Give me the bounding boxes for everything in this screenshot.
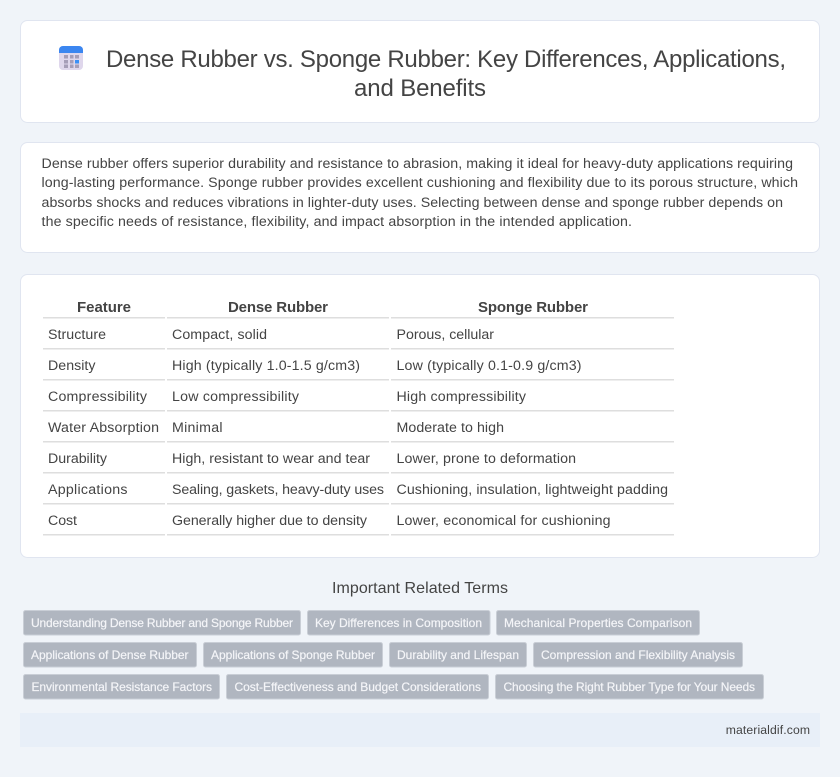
tag row 1: Mechanical Properties Comparison bbox=[504, 616, 692, 630]
heading: related terms: Important Related Terms bbox=[332, 580, 508, 597]
row: structure: Compact, solid bbox=[172, 327, 267, 343]
row: structure: Porous, cellular bbox=[396, 327, 494, 343]
title: Dense Rubber vs. Sponge Rubber: Key Differences, Applications, bbox=[106, 46, 786, 73]
tag row 2: Applications of Sponge Rubber bbox=[211, 648, 375, 662]
row: cost: Lower, economical for cushioning bbox=[396, 513, 610, 529]
row: density: Density bbox=[48, 358, 96, 374]
tag row 3: Cost-Effectiveness and Budget Considerations bbox=[234, 680, 481, 694]
row: applications: Sealing, gaskets, heavy-duty uses bbox=[172, 482, 384, 498]
row: applications bbox=[48, 482, 668, 498]
row: cost: Generally higher due to density bbox=[172, 513, 368, 529]
title bbox=[106, 46, 786, 102]
panel: summary paragraph: the specific needs of resistance, flexibility, and impact absorption in the intended application. bbox=[42, 214, 632, 230]
tag row 2: Compression and Flexibility Analysis bbox=[541, 648, 735, 662]
panel: summary paragraph: absorbs shocks and reduces vibrations in lighter-duty uses. Selecting between dense and sponge rubber depends on bbox=[42, 195, 783, 211]
tag row 2: Applications of Dense Rubber bbox=[31, 648, 188, 662]
icon: calendar bbox=[59, 46, 83, 70]
table header: Dense Rubber bbox=[228, 299, 328, 316]
tag row 3: Environmental Resistance Factors bbox=[32, 680, 212, 694]
table header bbox=[77, 299, 588, 316]
row: density bbox=[48, 358, 582, 374]
row: durability: Durability bbox=[48, 451, 108, 467]
tag row 2 bbox=[24, 642, 742, 667]
row: density: High (typically 1.0-1.5 g/cm3) bbox=[172, 358, 360, 374]
row: applications: Applications bbox=[48, 482, 128, 498]
panel: summary paragraph bbox=[20, 142, 820, 252]
footer bbox=[20, 713, 820, 747]
footer: materialdif.com bbox=[726, 723, 810, 737]
row: water absorption: Water Absorption bbox=[48, 420, 159, 436]
row: applications: Cushioning, insulation, lightweight padding bbox=[396, 482, 668, 498]
panel: title header bbox=[20, 20, 820, 122]
row: structure: Structure bbox=[48, 327, 106, 343]
row: compressibility: High compressibility bbox=[396, 389, 527, 405]
table rules bbox=[43, 317, 674, 536]
tag row 3 bbox=[24, 674, 764, 699]
tag row 1 bbox=[24, 610, 700, 635]
panel: comparison table bbox=[20, 274, 820, 558]
row: density: Low (typically 0.1-0.9 g/cm3) bbox=[396, 358, 582, 374]
panel: summary paragraph: Dense rubber offers superior durability and resistance to abrasion, making it ideal for heavy-duty applications requiring bbox=[42, 156, 793, 172]
row: structure bbox=[48, 327, 494, 343]
row: durability: Lower, prone to deformation bbox=[396, 451, 576, 467]
row: water absorption: Minimal bbox=[172, 420, 222, 436]
row: water absorption: Moderate to high bbox=[396, 420, 504, 436]
row: compressibility bbox=[48, 389, 527, 405]
tag row 1: Key Differences in Composition bbox=[315, 616, 482, 630]
row: compressibility: Low compressibility bbox=[172, 389, 300, 405]
table header: Sponge Rubber bbox=[478, 299, 588, 316]
panel: summary paragraph: long-lasting performance. Sponge rubber provides excellent cushioning and flexibility due to its porous structure, which bbox=[42, 175, 798, 191]
row: compressibility: Compressibility bbox=[48, 389, 148, 405]
tag row 3: Choosing the Right Rubber Type for Your Needs bbox=[504, 680, 755, 694]
related term tags bbox=[24, 610, 764, 699]
row: durability bbox=[48, 451, 576, 467]
row: durability: High, resistant to wear and tear bbox=[172, 451, 370, 467]
row: water absorption bbox=[48, 420, 504, 436]
tag row 2: Durability and Lifespan bbox=[397, 648, 519, 662]
row: cost bbox=[48, 513, 610, 529]
tag row 1: Understanding Dense Rubber and Sponge Rubber bbox=[31, 616, 293, 630]
title: and Benefits bbox=[354, 75, 486, 102]
row: cost: Cost bbox=[48, 513, 77, 529]
table header: Feature bbox=[77, 299, 131, 316]
